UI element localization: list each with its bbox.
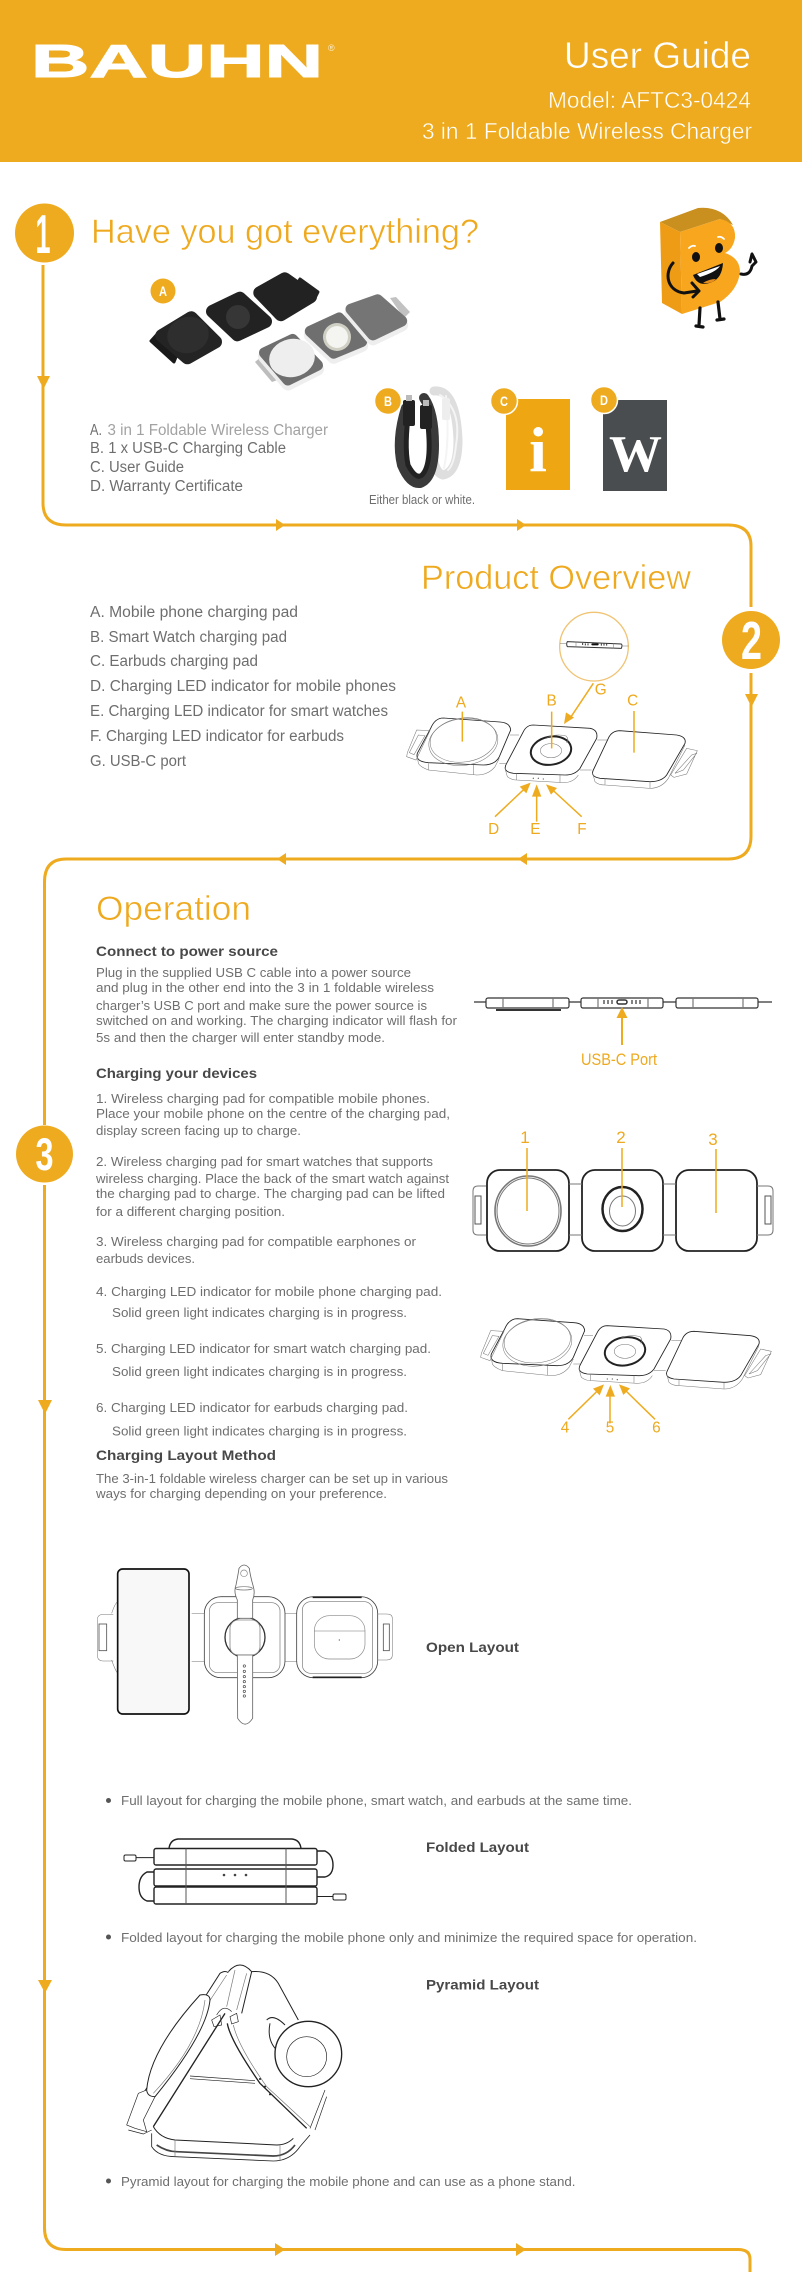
section 2: product overview [90, 559, 780, 838]
parts list: D. Charging LED indicator for mobile phones [90, 678, 396, 695]
callout lines and arrows [462, 683, 634, 822]
connect to power source: charger’s USB C port and make sure the power source is [96, 998, 427, 1013]
open layout bullet: Full layout for charging the mobile phone, smart watch, and earbuds at the same time. [121, 1793, 632, 1808]
callout letters: E [530, 821, 540, 838]
badge A [150, 278, 176, 304]
charging layout method: Charging Layout Method [96, 1447, 276, 1463]
connect to power source: Connect to power source [96, 943, 278, 959]
folded layout bullet: Folded layout for charging the mobile phone only and minimize the required space for operation. [121, 1930, 697, 1945]
numbers: 1 [520, 1128, 530, 1147]
contents list: 3 in 1 Foldable Wireless Charger [108, 422, 328, 439]
badge B [374, 388, 402, 414]
callout lines [527, 1148, 716, 1213]
parts list: B. Smart Watch charging pad [90, 629, 287, 646]
charging your devices: 3. Wireless charging pad for compatible earphones or [96, 1234, 417, 1249]
numbers [520, 1128, 718, 1149]
pyramid layout drawing [127, 1965, 342, 2161]
charging your devices: wireless charging. Place the back of the smart watch against [95, 1171, 449, 1186]
numbers: 5 [606, 1420, 614, 1437]
parts list: F. Charging LED indicator for earbuds [90, 728, 344, 745]
step number 3 [16, 1126, 73, 1182]
badge D: D [600, 392, 608, 408]
parts list: C. Earbuds charging pad [90, 653, 258, 670]
open layout label: Open Layout [426, 1639, 519, 1655]
charging your devices: Place your mobile phone on the centre of the charging pad, [96, 1106, 450, 1121]
charging your devices: Solid green light indicates charging is in progress. [112, 1364, 407, 1379]
arrow heads [520, 712, 574, 797]
product photo: black charger [151, 279, 318, 362]
cable photo [400, 391, 458, 483]
product name: 3 in 1 Foldable Wireless Charger [422, 118, 752, 144]
product photo: white charger [255, 297, 410, 384]
front view diagram with numbered pads [473, 1128, 773, 1251]
badge C [490, 388, 518, 414]
USB-C arrow [616, 1007, 628, 1045]
charging your devices: 1. Wireless charging pad for compatible mobile phones. [96, 1091, 430, 1106]
charging your devices: display screen facing up to charge. [96, 1123, 301, 1138]
callout letters: C [627, 692, 638, 709]
folded layout drawing [124, 1839, 346, 1904]
step number 3: 3 [36, 1129, 54, 1180]
numbers: 2 [616, 1128, 626, 1147]
connect to power source [96, 943, 458, 1045]
badge A: A [159, 283, 167, 299]
contents list [90, 422, 328, 495]
step number 1 [15, 203, 74, 265]
USB-C label: USB-C Port [581, 1050, 657, 1069]
edge view diagram with USB-C port [474, 998, 772, 1069]
logo [31, 35, 335, 87]
charging layout method: ways for charging depending on your preference. [95, 1486, 387, 1501]
charging layout method: The 3-in-1 foldable wireless charger can be set up in various [96, 1471, 449, 1486]
flow line connecting the sections [43, 265, 751, 2272]
open layout drawing [97, 1565, 392, 1724]
pyramid layout bullet: Pyramid layout for charging the mobile phone and can use as a phone stand. [121, 2174, 576, 2189]
contents list: C. User Guide [90, 459, 184, 476]
callout letters: F [577, 821, 587, 838]
callout letters: B [547, 693, 557, 710]
numbers: 6 [652, 1420, 661, 1437]
heading: Have you got everything? [91, 213, 479, 251]
numbers [561, 1420, 661, 1437]
numbers: 4 [561, 1420, 570, 1437]
contents list: A. [90, 422, 102, 439]
flow arrows [37, 376, 758, 2256]
step number 1: 1 [36, 203, 50, 265]
contents list: D. Warranty Certificate [90, 478, 243, 495]
header band [0, 0, 802, 162]
charging your devices: Solid green light indicates charging is in progress. [112, 1424, 407, 1438]
folded layout label: Folded Layout [426, 1839, 529, 1855]
header title: User Guide [564, 35, 751, 76]
logo: BAUHN [31, 35, 323, 87]
mascot [660, 208, 756, 327]
pyramid layout label: Pyramid Layout [426, 1976, 539, 1992]
connect to power source: and plug in the other end into the 3 in 1 foldable wireless [96, 980, 435, 995]
badge B: B [384, 393, 392, 409]
parts list: A. Mobile phone charging pad [90, 604, 298, 621]
charging your devices: 5. Charging LED indicator for smart watch charging pad. [96, 1341, 431, 1356]
numbers: 3 [708, 1130, 718, 1149]
arrow heads [593, 1384, 630, 1397]
charging your devices [95, 1065, 450, 1438]
heading: Operation [96, 890, 251, 928]
section 1: have you got everything [15, 203, 756, 507]
warranty card: W [609, 426, 662, 483]
badge C: C [500, 393, 508, 409]
charging your devices: Solid green light indicates charging is in progress. [112, 1305, 407, 1320]
charger diagram with callouts [407, 612, 697, 838]
user guide card: i [529, 414, 547, 485]
charging your devices: for a different charging position. [96, 1204, 285, 1219]
connect to power source: 5s and then the charger will enter standby mode. [96, 1030, 385, 1045]
charging your devices: 6. Charging LED indicator for earbuds charging pad. [96, 1400, 408, 1415]
logo: ® [328, 43, 335, 53]
charging layout method [95, 1447, 449, 1501]
contents list: B. 1 x USB-C Charging Cable [90, 440, 286, 457]
parts list: E. Charging LED indicator for smart watches [90, 703, 388, 720]
callout letters [456, 681, 638, 838]
charging your devices: 4. Charging LED indicator for mobile phone charging pad. [96, 1284, 442, 1299]
connect to power source: switched on and working. The charging indicator will flash for [96, 1013, 458, 1028]
USB-C detail circle [560, 612, 629, 681]
parts list [90, 604, 396, 770]
step number 2 [722, 611, 780, 671]
charging your devices: the charging pad to charge. The charging pad can be lifted [96, 1186, 445, 1201]
charging your devices: Charging your devices [96, 1065, 257, 1081]
model number: Model: AFTC3-0424 [548, 87, 751, 113]
cable note: Either black or white. [369, 493, 475, 507]
angled diagram with LED callouts [481, 1314, 771, 1437]
section 3: operation [16, 890, 773, 2189]
callout letters: A [456, 694, 467, 711]
callout letters: D [488, 821, 499, 838]
step number 2: 2 [741, 611, 762, 671]
callout letters: G [595, 681, 607, 698]
warranty card [603, 400, 667, 491]
heading: Product Overview [421, 559, 691, 597]
parts list: G. USB-C port [90, 753, 187, 770]
charging your devices: 2. Wireless charging pad for smart watches that supports [96, 1154, 434, 1169]
charging your devices: earbuds devices. [96, 1251, 195, 1266]
connect to power source: Plug in the supplied USB C cable into a power source [96, 965, 411, 980]
user guide card [506, 399, 570, 490]
badge D [590, 386, 618, 414]
callout lines [568, 1390, 655, 1423]
